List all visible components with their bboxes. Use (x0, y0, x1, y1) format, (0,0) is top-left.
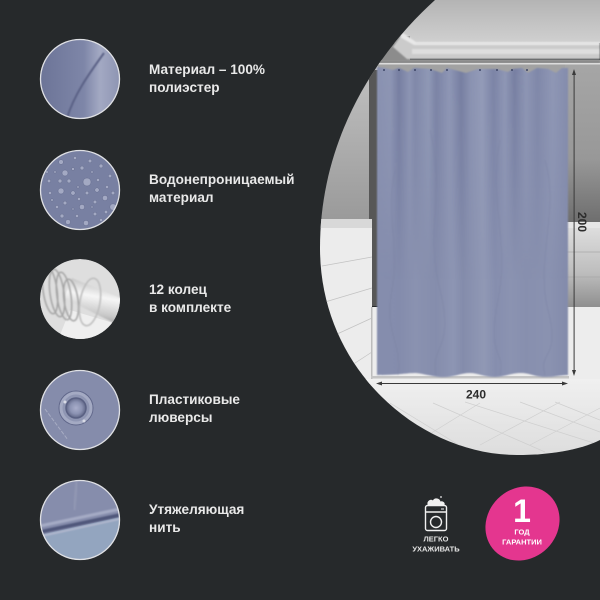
feature 4: grommets (40, 370, 240, 450)
caption: ГОД (514, 528, 530, 536)
thumbnail: fabric (40, 39, 120, 119)
dimension arrow: width (376, 382, 568, 386)
label: нить (149, 520, 181, 535)
wainscoting (320, 219, 372, 384)
label: люверсы (149, 410, 212, 425)
label: Утяжеляющая (149, 502, 244, 517)
label: Водонепроницаемый (149, 172, 295, 187)
ceiling (394, 0, 600, 43)
caption: УХАЖИВАТЬ (412, 544, 460, 554)
feature 2: waterproof (40, 150, 295, 230)
icon: washing machine (426, 496, 446, 530)
thumbnail: hem thread (40, 480, 120, 560)
feature 5: weighted thread (40, 480, 244, 560)
caption: ЛЕГКО (424, 534, 449, 544)
crown moulding (378, 33, 600, 63)
label: материал (149, 190, 214, 205)
badge: 1 year warranty (470, 471, 575, 576)
label: в комплекте (149, 300, 232, 315)
thumbnail: plastic grommet (40, 370, 120, 450)
caption: ГАРАНТИИ (502, 538, 542, 546)
thumbnail: water drops (40, 150, 120, 230)
bathtub (371, 307, 600, 381)
feature 1: material (40, 39, 265, 119)
pink blob (470, 471, 575, 576)
label: полиэстер (149, 80, 220, 95)
thumbnail: rod with rings (40, 259, 120, 339)
dimension label: 200: 200 (575, 212, 589, 232)
label: Материал – 100% (149, 62, 265, 77)
wall behind moulding (378, 36, 410, 66)
curtain grommets (383, 69, 528, 71)
label: Пластиковые (149, 392, 240, 407)
feature 3: rings (40, 259, 232, 345)
wall (320, 60, 380, 220)
floor (366, 379, 600, 455)
badge: easy care (412, 496, 460, 554)
number: 1 (513, 493, 531, 529)
dimension arrow: height (572, 69, 576, 376)
dimension label: 240: 240 (466, 388, 486, 402)
curtain (377, 67, 568, 377)
photo: bathroom with shower curtain (320, 0, 600, 459)
shower rod (378, 63, 600, 64)
label: 12 колец (149, 282, 208, 297)
